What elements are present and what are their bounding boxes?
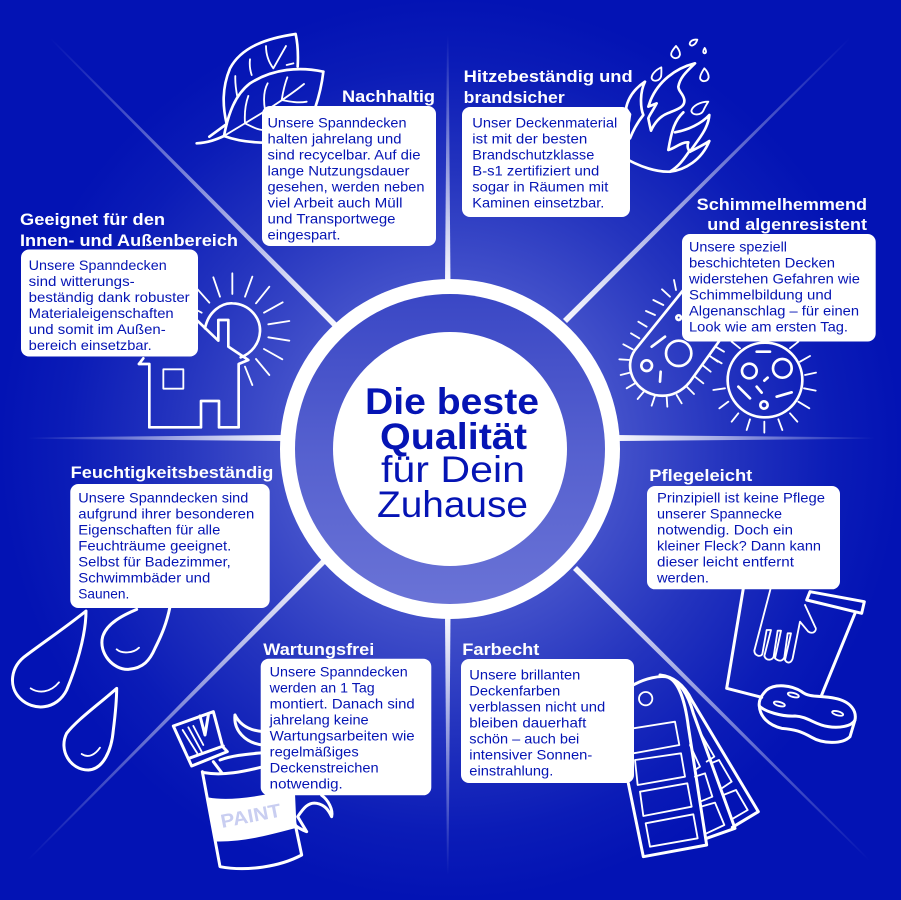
heading: und algenresistent [707, 216, 868, 234]
text card [21, 250, 198, 356]
text card: verblassen nicht und [469, 698, 605, 714]
text card [682, 234, 876, 342]
text card: widerstehen Gefahren wie [688, 270, 860, 286]
text card: Saunen. [78, 585, 129, 601]
panel: Hitzebeständig [462, 40, 709, 217]
text card: schön – auch bei [469, 730, 579, 746]
text card: gesehen, werden neben [268, 178, 424, 194]
text card: Unsere Spanndecken [270, 663, 408, 679]
text card: jahrelang keine [269, 711, 369, 727]
text card: Eigenschaften für alle [78, 521, 221, 537]
text card [262, 106, 436, 246]
text card: Unsere Spanndecken sind [78, 489, 248, 505]
panel: Feuchtigkeitsbeständig [12, 464, 273, 770]
heading: Geeignet für den [20, 211, 165, 229]
text card: Unsere brillanten [469, 666, 580, 682]
text card: Deckenfarben [469, 682, 560, 698]
heading: Farbecht [462, 641, 540, 659]
text card: aufgrund ihrer besonderen [78, 505, 254, 521]
can label: PAINT [219, 801, 283, 833]
text card: Selbst für Badezimmer, [78, 553, 231, 569]
icon: mould bacteria [619, 280, 816, 433]
text card: Feuchträume geeignet. [78, 537, 231, 553]
text card: intensiver Sonnen- [469, 746, 593, 762]
text card: werden. [656, 569, 709, 585]
text card: viel Arbeit auch Müll [268, 194, 402, 210]
heading: brandsicher [464, 89, 565, 107]
text card: unserer Spannecke [657, 505, 782, 521]
heading: Feuchtigkeitsbeständig [71, 464, 273, 482]
text card: einstrahlung. [469, 762, 553, 778]
text card: Unsere Spanndecken [268, 114, 406, 130]
text card: Materialeigenschaften [29, 305, 174, 321]
text card: sogar in Räumen mit [472, 178, 608, 194]
icon: water drops [12, 607, 170, 770]
heading: Schimmelhemmend [697, 196, 867, 214]
heading [464, 68, 633, 107]
text card: dieser leicht entfernt [657, 553, 794, 569]
text card [70, 484, 270, 608]
icon: bucket, glove and sponge [727, 588, 864, 742]
panel: Geeignet für den Innen- und Außenbereich [20, 211, 289, 427]
text card: lange Nutzungsdauer [268, 162, 410, 178]
text card: Brandschutzklasse [472, 146, 595, 162]
text card [462, 107, 630, 217]
text card [461, 659, 634, 783]
text card: regelmäßiges [270, 743, 359, 759]
text card: bleiben dauerhaft [469, 714, 586, 730]
heading [697, 196, 868, 234]
text card: sind recycelbar. Auf die [268, 146, 421, 162]
text card: beschichteten Decken [689, 254, 835, 270]
panel: Nachhaltig [197, 34, 436, 246]
text card: Prinzipiell ist keine Pflege [657, 489, 825, 505]
heading: Hitzebeständig und [464, 68, 633, 86]
text card: kleiner Fleck? Dann kann [657, 537, 821, 553]
heading: Pflegeleicht [649, 467, 753, 485]
text card: Unsere speziell [689, 238, 787, 254]
text card: Unser Deckenmaterial [472, 114, 617, 130]
icon: paint can and brush [173, 712, 332, 869]
central badge [280, 279, 620, 619]
badge title [365, 381, 539, 525]
text card: Schimmelbildung und [689, 286, 832, 302]
text card: Schwimmbäder und [78, 569, 210, 585]
text card: montiert. Danach sind [270, 695, 415, 711]
panel: Wartungsfrei [173, 641, 431, 869]
heading: Nachhaltig [342, 88, 435, 106]
panel: Pflegeleicht [647, 467, 864, 742]
icon: house and sun [139, 273, 289, 427]
panel: Schimmelhemmend [619, 196, 876, 433]
text card: Kaminen einsetzbar. [472, 194, 604, 210]
text card: B-s1 zertifiziert und [472, 162, 599, 178]
text card: Wartungsarbeiten wie [270, 727, 415, 743]
badge title: Qualität [380, 416, 527, 457]
text card: Unsere Spanndecken [29, 257, 167, 273]
text card: ist mit der besten [472, 130, 587, 146]
text card: Algenanschlag – für einen [689, 302, 859, 318]
text card: halten jahrelang und [268, 130, 402, 146]
text card: und somit im Außen- [29, 321, 166, 337]
text card: bereich einsetzbar. [29, 337, 152, 353]
text card: beständig dank robuster [29, 289, 190, 305]
heading: Wartungsfrei [263, 641, 374, 659]
text card: und Transportwege [268, 210, 396, 226]
badge title: für Dein [381, 449, 525, 490]
icon: leaves [197, 34, 323, 143]
heading: Innen- und Außenbereich [20, 232, 238, 250]
text card: notwendig. [270, 775, 343, 791]
text card: Deckenstreichen [270, 759, 379, 775]
text card [647, 486, 840, 589]
icon: flames [626, 40, 709, 172]
text card: werden an 1 Tag [269, 679, 375, 695]
text card: eingespart. [268, 226, 340, 242]
badge title: Zuhause [377, 484, 528, 525]
panel: Farbecht [461, 641, 758, 857]
text card: Look wie am ersten Tag. [689, 318, 848, 334]
heading [20, 211, 238, 250]
text card: notwendig. Doch ein [657, 521, 793, 537]
badge title: Die beste [365, 381, 539, 422]
icon: colour swatch fan [628, 675, 758, 857]
text card [261, 659, 431, 795]
text card: sind witterungs- [29, 273, 135, 289]
